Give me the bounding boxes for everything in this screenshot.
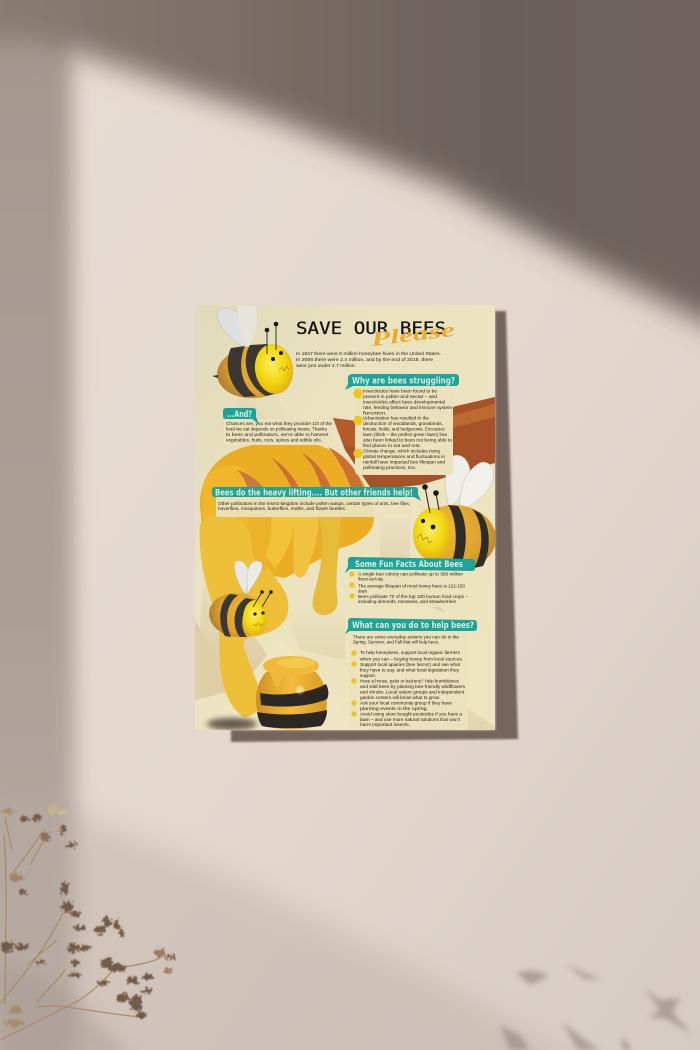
- intro text: were just under 2.7 million.: [296, 363, 356, 369]
- panel: why are bees struggling: Insecticides have been found to be: [363, 388, 437, 394]
- poster: [195, 305, 500, 730]
- panel: why are bees struggling: rainfall have impacted bee lifespan and: [363, 460, 445, 466]
- panel: what can you do: they have to say, and what local legislation they: [360, 668, 460, 674]
- honey drips: [200, 512, 342, 717]
- panel: why are bees struggling: destruction of woodlands, grasslands,: [363, 421, 443, 427]
- background triangles: [195, 408, 495, 730]
- plant shadow bottom right: [500, 965, 692, 1050]
- bee top left: [212, 306, 296, 402]
- panel: why are bees struggling: rate, feeding behavior and immune system: [363, 405, 452, 411]
- panel: heavy lifting: hoverflies, mosquitoes, butterflies, moths, and flower beetles.: [218, 506, 346, 512]
- panel: why are bees struggling: Why are bees struggling?: [352, 376, 455, 386]
- panel: and: [223, 408, 333, 445]
- intro text: [296, 351, 441, 369]
- panel: heavy lifting: [212, 487, 421, 517]
- honey pot: [207, 656, 328, 730]
- panel: why are bees struggling: insecticides affect bees developmental: [363, 400, 445, 406]
- panel: what can you do: There are some everyday actions you can do in the: [353, 634, 459, 640]
- panel: fun facts: Some Fun Facts About Bees: [355, 560, 463, 570]
- panel: fun facts: including almonds, tomatoes, and strawberries!: [358, 599, 456, 605]
- panel: why are bees struggling: function.: [363, 410, 387, 416]
- panel: and: food we eat depends on pollinating insets. Thanks: [226, 426, 328, 432]
- panel: what can you do: [345, 618, 477, 730]
- panel: fun facts: days: [358, 588, 367, 594]
- bee right: [413, 455, 499, 573]
- panel: why are bees struggling: also been linked to bees not being able to: [363, 438, 452, 444]
- dried plant: [0, 804, 175, 1040]
- panel: why are bees struggling: forests, fields, and hedgerows. Excessive: [363, 426, 445, 432]
- panel: what can you do: Spring, Summer, and Fall that will help bees.: [353, 640, 439, 646]
- panel: fun facts: The average lifespan of most honey bees is 122-150: [358, 584, 465, 590]
- title: Please: [368, 319, 456, 351]
- panel: why are bees struggling: pollinating practices, too.: [363, 465, 416, 471]
- panel: why are bees struggling: Urbanization has resulted in the: [363, 416, 429, 422]
- poster shadow: [231, 311, 518, 742]
- panel: what can you do: lawn – and use more natural solutions that won't: [360, 717, 461, 723]
- panel: why are bees struggling: lawn (think – the perfect green lawn) has: [363, 432, 448, 438]
- intro text: In 1947 there were 6 million honeybee hives in the United States.: [296, 351, 441, 357]
- panel: fun facts: A single bee colony can pollinate up to 300 million: [358, 572, 463, 578]
- panel: what can you do: Support local apiaries (bee farms!) and see what: [360, 662, 461, 668]
- title: SAVE OUR BEES: [296, 319, 446, 339]
- panel: fun facts: Bees pollinate 70 of the top 100 human food crops –: [358, 594, 468, 600]
- title: [297, 321, 454, 346]
- panel: what can you do: Ask your local community group if they have: [360, 700, 452, 706]
- panel: what can you do: garden centers will know what to grow.: [360, 695, 440, 701]
- panel: and: ...And?: [227, 410, 252, 420]
- honey dipper wood: [333, 397, 495, 490]
- panel: and: vegetables, fruits, nuts, spices and edible oils.: [226, 438, 322, 444]
- panel: what can you do: when you can – buying honey from local sources.: [360, 656, 463, 662]
- bee lower left: [207, 561, 273, 640]
- panel: what can you do: Have a house, patio or balcony? Help bumblebees: [360, 678, 459, 684]
- panel: what can you do: Avoid using store bought pesticides if you have a: [360, 712, 462, 718]
- panel: and: Chances are, you eat what they provide! 1/3 of the: [226, 421, 332, 427]
- panel: why are bees struggling: Climate change, which includes rising: [363, 448, 440, 454]
- panel: what can you do: harm important insects.: [360, 722, 410, 728]
- panel: why are bees struggling: present in pollen and nectar – and: [363, 394, 437, 400]
- panel: what can you do: planting events in the spring.: [360, 706, 428, 712]
- panel: what can you do: What can you do to help bees?: [352, 621, 474, 631]
- panel: what can you do: and shrubs. Local nature groups and independent: [360, 690, 465, 696]
- intro text: In 2008 there were 2.4 million, and by the end of 2019, there: [296, 357, 433, 363]
- panel: what can you do: and wild bees by planting bee-friendly wildflowers: [360, 684, 466, 690]
- panel: fun facts: [345, 557, 475, 607]
- panel: why are bees struggling: find places to eat and rest.: [363, 443, 421, 449]
- panel: what can you do: support.: [360, 673, 376, 679]
- panel: fun facts: flowers each day: [358, 576, 383, 582]
- panel: why are bees struggling: global temperatures and fluctuations in: [363, 454, 445, 460]
- panel: why are bees struggling: [345, 374, 459, 475]
- panel: and: to bees and pollinators, we're able to harvest: [226, 432, 329, 438]
- panel: what can you do: To help honeybees, support local organic farmers: [360, 650, 461, 656]
- honey ribs: [200, 444, 374, 578]
- panel: heavy lifting: Other pollinators in the insect kingdom include pollen wasps, certain types of ants, bee flies,: [218, 501, 410, 507]
- panel: heavy lifting: Bees do the heavy lifting.... But other friends help!: [215, 488, 413, 498]
